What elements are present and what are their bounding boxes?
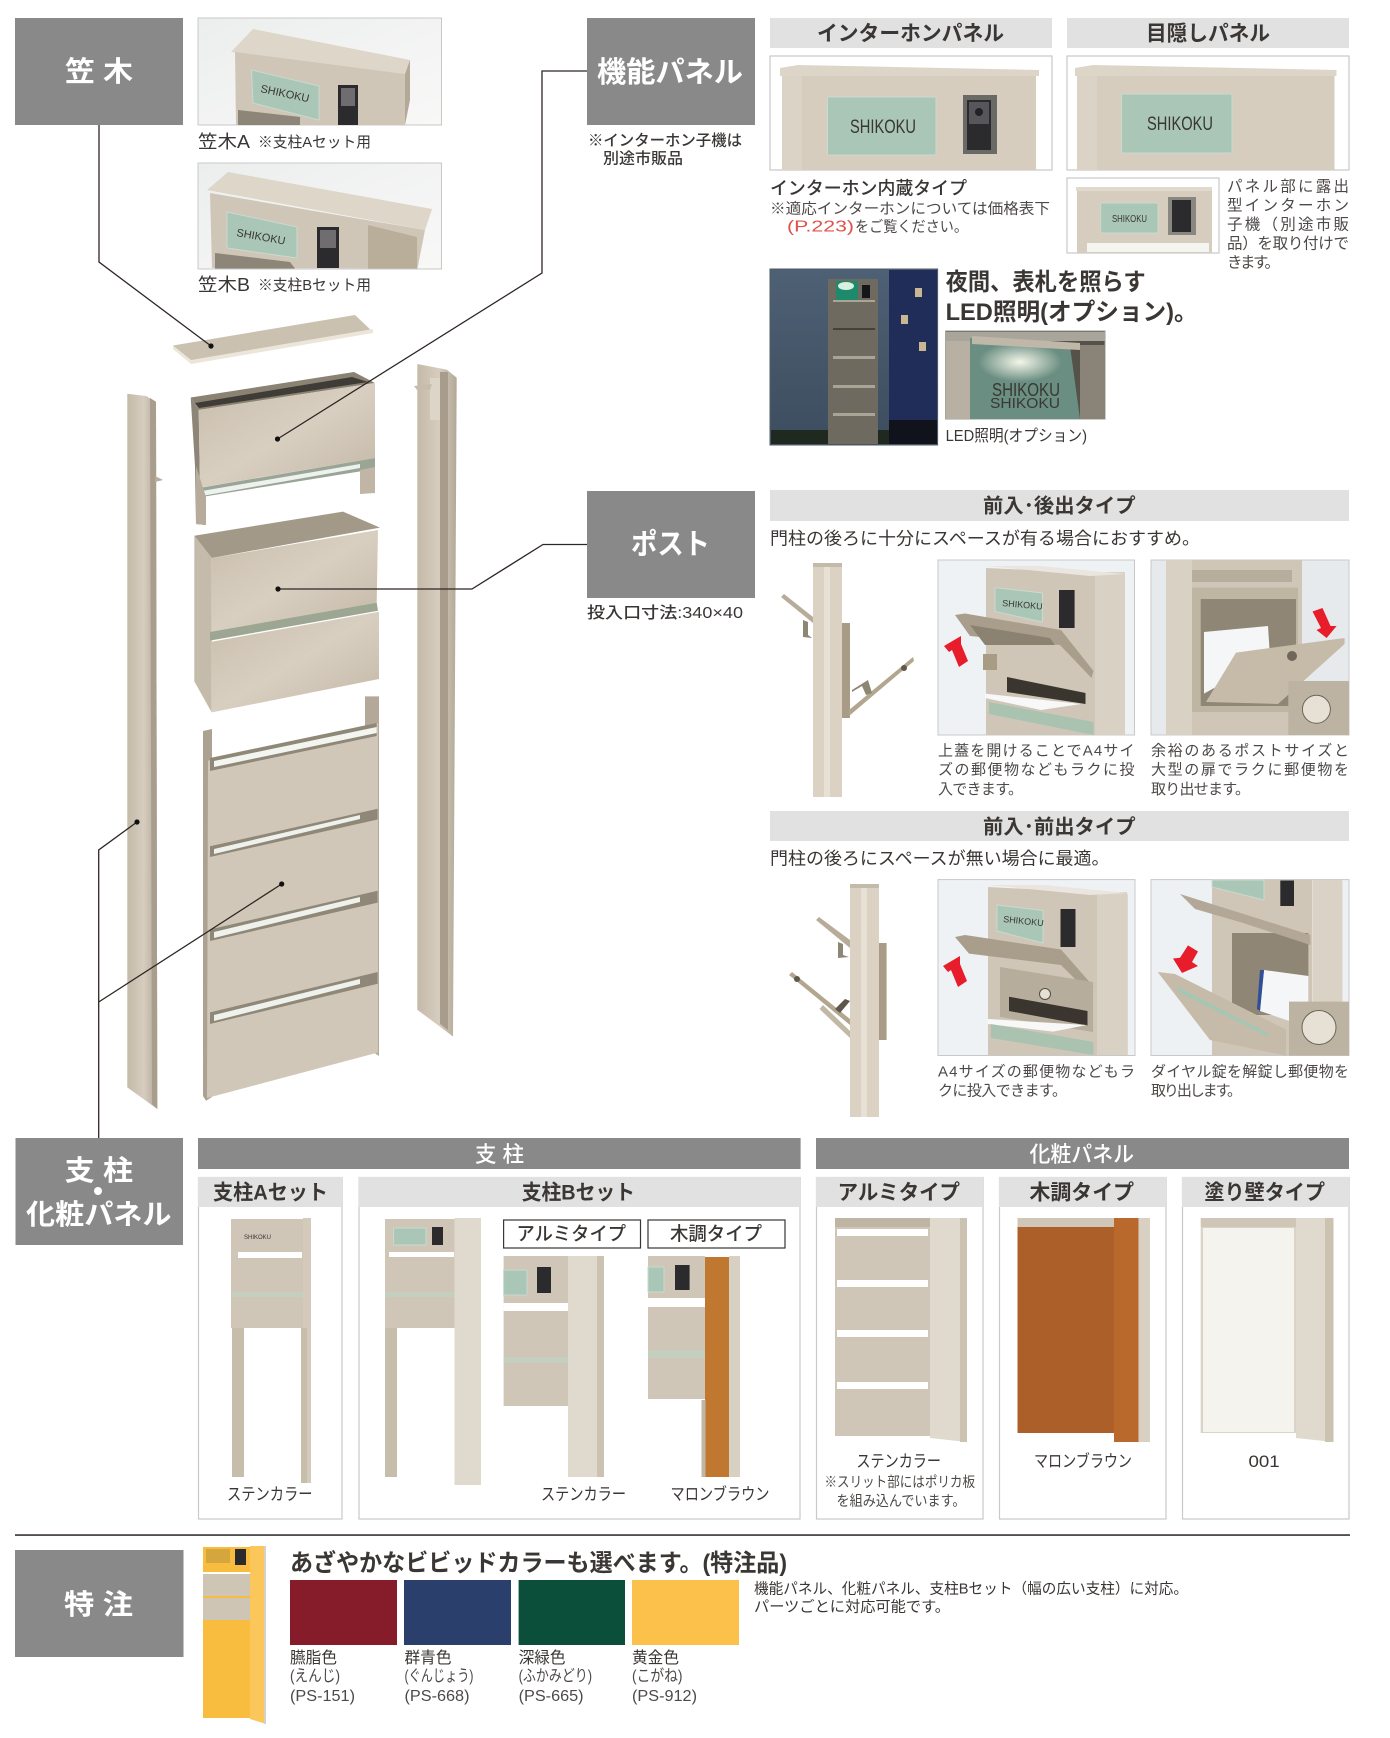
label: 特注: 特 注 <box>64 1589 133 1620</box>
caption: 笠木B: ※支柱Bセット用 <box>258 277 371 294</box>
swatch: 黄金色 <box>632 1580 739 1705</box>
bar: 化粧パネル: 化粧パネル <box>1030 1142 1134 1167</box>
photo: LED照明: SHIKOKU <box>992 380 1060 400</box>
swatch: 群青色 <box>404 1580 511 1705</box>
header: インターホンパネル <box>770 18 1052 48</box>
swatch: 臙脂色: 臙脂色 <box>290 1649 337 1667</box>
tag: アルミタイプ <box>504 1220 640 1248</box>
caption: ダイヤル錠: ダイヤル錠を解錠し郵便物を <box>1151 1064 1349 1080</box>
swatch: 群青色: 群青色 <box>404 1649 452 1667</box>
product: 支柱Aセット <box>231 1218 311 1483</box>
caption: A4サイズ: A4サイズの郵便物などもラ <box>938 1064 1135 1080</box>
caption: LED照明: LED照明(オプション) <box>946 427 1087 445</box>
swatch: 深緑色: 深緑色 <box>519 1649 566 1667</box>
illustration: 前入・前出 side view <box>789 884 887 1117</box>
caption: 笠木B: 笠木B <box>198 275 250 295</box>
caption: 余裕のあるポスト <box>1151 742 1349 798</box>
photo: 大型の扉 <box>1151 560 1349 735</box>
swatch: 群青色: (PS-668) <box>404 1688 470 1705</box>
note: インターホン子機: 別途市販品 <box>603 150 683 168</box>
header: 前入・後出タイプ: 前入･後出タイプ <box>983 494 1136 518</box>
photo: インターホンパネル <box>770 56 1052 170</box>
arrow: red up-left <box>944 636 968 667</box>
connector: 支柱・化粧パネル <box>99 819 284 1138</box>
panel: アルミタイプ <box>816 1177 983 1519</box>
text: 十分にスペース: 門柱の後ろに十分にスペースが有る場合におすすめ。 <box>770 528 1200 548</box>
label: ポスト: ポスト <box>631 528 710 561</box>
panel: 木調タイプ <box>999 1177 1166 1519</box>
swatch: 深緑色: (ふかみどり) <box>519 1667 592 1685</box>
arrow: red up-left 2 <box>943 956 967 987</box>
exploded: 笠木 lid <box>173 315 373 364</box>
text: パネル部に露出型 <box>1227 178 1349 272</box>
swatch: 臙脂色 <box>290 1580 397 1705</box>
caption: ダイヤル錠: 取り出します。 <box>1151 1082 1242 1100</box>
product: 木調化粧パネル <box>1018 1218 1150 1442</box>
photo: 笠木A <box>198 18 442 125</box>
header: 目隠しパネル <box>1067 18 1349 48</box>
photo: 目隠しパネル: SHIKOKU <box>1147 114 1213 135</box>
arrow: red down-left <box>1173 945 1198 973</box>
label: 機能パネル: 機能パネル <box>597 56 743 89</box>
label: 支柱・化粧パネル: 化粧パネル <box>26 1199 172 1230</box>
header: 目隠しパネル: 目隠しパネル <box>1146 22 1270 46</box>
header: 前入・後出タイプ <box>770 490 1349 521</box>
text: パネル部に露出型: きます。 <box>1227 254 1280 272</box>
text: ステンカラー: ステンカラー <box>541 1485 626 1504</box>
photo: 夜間の門柱 <box>770 269 938 445</box>
header: 前入・前出タイプ: 前入･前出タイプ <box>983 816 1136 838</box>
heading: LED照明: 夜間、表札を照らす <box>946 269 1146 296</box>
text: パネル部に露出型: 型インターホン <box>1227 196 1349 214</box>
label: 支柱・化粧パネル <box>16 1138 183 1245</box>
label: 機能パネル <box>587 18 755 125</box>
panel: 支柱Aセット: 支柱Aセット <box>213 1182 328 1204</box>
caption: 上蓋を開ける: 上蓋を開けることでA4サイ <box>938 742 1134 760</box>
swatch: 黄金色: (PS-912) <box>632 1688 697 1705</box>
photo: 露出型インターホン: SHIKOKU <box>1112 214 1147 225</box>
arrow: red down-right <box>1312 608 1337 638</box>
text: ステンカラー: ステンカラー <box>227 1485 312 1504</box>
swatch: 深緑色: (PS-665) <box>519 1688 584 1705</box>
note: 投入口寸法: 投入口寸法:340×40 <box>587 604 743 622</box>
panel: 支柱Bセット: 支柱Bセット <box>522 1182 635 1204</box>
caption: 上蓋を開ける: ズの郵便物などもラクに投 <box>938 762 1134 778</box>
bar: 支柱 <box>198 1138 801 1169</box>
text: ステンカラー: ステンカラー <box>856 1452 941 1471</box>
product: 支柱Aセット: SHIKOKU <box>244 1235 271 1241</box>
text: 対応パーツ: パーツごとに対応可能です。 <box>754 1598 950 1616</box>
product: アルミ化粧パネル <box>835 1218 967 1442</box>
panel: 木調タイプ: 木調タイプ <box>1030 1182 1134 1204</box>
swatch: 黄金色: (こがね) <box>632 1667 682 1685</box>
caption: A4サイズ <box>938 1064 1135 1100</box>
photo: LED照明: SHIKOKU <box>990 395 1060 412</box>
caption: 余裕のあるポスト: 余裕のあるポストサイズと <box>1151 742 1349 760</box>
label: 特注 <box>15 1550 184 1657</box>
swatch: 臙脂色: (PS-151) <box>290 1688 355 1705</box>
text: インターホン内蔵タイプ: (P.223) <box>787 218 854 236</box>
exploded: left post <box>127 394 163 1109</box>
photo: A4サイズ投入: SHIKOKU <box>1003 914 1044 928</box>
text: 対応パーツ <box>754 1580 1188 1616</box>
text: ステンカラー: を組み込んでいます。 <box>836 1493 966 1510</box>
caption: 余裕のあるポスト: 大型の扉でラクに郵便物を <box>1151 762 1349 778</box>
label: 支柱・化粧パネル: 支 柱 <box>65 1155 133 1186</box>
panel: 支柱Bセット <box>358 1177 800 1519</box>
text: 対応パーツ: 機能パネル、化粧パネル、支柱Bセット（幅の広い支柱）に対応。 <box>754 1580 1188 1598</box>
exploded: ポスト <box>194 512 380 712</box>
panel: 支柱Aセット <box>198 1177 342 1519</box>
illustration: 前入・後出 side view <box>781 563 914 797</box>
text: インターホン内蔵タイプ: をご覧ください。 <box>855 218 968 236</box>
caption: 余裕のあるポスト: 取り出せます。 <box>1151 781 1250 798</box>
text: インターホン内蔵タイプ <box>770 178 1050 236</box>
bar: 化粧パネル <box>816 1138 1349 1169</box>
note: インターホン子機 <box>588 132 742 168</box>
photo: インターホンパネル: SHIKOKU <box>850 117 916 138</box>
product: アルミタイプ <box>504 1256 604 1477</box>
product: 支柱Bセット <box>385 1218 481 1485</box>
caption: 笠木A: ※支柱Aセット用 <box>258 134 371 151</box>
caption: A4サイズ: クに投入できます。 <box>938 1082 1067 1100</box>
connector: 機能パネル <box>275 71 587 442</box>
photo: 目隠しパネル <box>1067 56 1349 170</box>
photo: A4サイズ投入 <box>938 880 1135 1056</box>
heading: LED照明: LED照明(オプション)。 <box>946 299 1198 326</box>
header: 前入・前出タイプ <box>770 811 1349 841</box>
photo: 上蓋を開ける: SHIKOKU <box>1002 598 1043 612</box>
caption: 上蓋を開ける: 入できます。 <box>938 781 1023 798</box>
tag: 木調タイプ: 木調タイプ <box>670 1223 762 1245</box>
swatch: 黄金色: 黄金色 <box>632 1649 679 1667</box>
text: スペースが無い: 門柱の後ろにスペースが無い場合に最適。 <box>770 848 1110 868</box>
header: インターホンパネル: インターホンパネル <box>817 22 1004 46</box>
photo: ダイヤル錠 <box>1151 880 1349 1056</box>
label: 笠木: 笠 木 <box>65 56 133 87</box>
product: 特注カラー門柱 <box>203 1546 266 1724</box>
photo: 笠木B: SHIKOKU <box>235 227 286 248</box>
swatch: 深緑色 <box>519 1580 625 1705</box>
panel: 塗り壁タイプ: 塗り壁タイプ <box>1204 1182 1325 1204</box>
tag: 木調タイプ <box>648 1220 785 1248</box>
exploded: 化粧パネル <box>203 696 379 1101</box>
exploded: 機能パネル <box>191 372 375 525</box>
caption: 笠木A <box>198 132 371 152</box>
text: パネル部に露出型: 品）を取り付けで <box>1227 234 1349 252</box>
text: インターホン内蔵タイプ: ※適応インターホンについては価格表下 <box>770 200 1050 218</box>
photo: 笠木A: SHIKOKU <box>259 83 310 105</box>
section: 前入・前出タイプ <box>770 811 1349 1117</box>
bar: 支柱: 支 柱 <box>475 1142 524 1167</box>
label: 笠木 <box>15 18 183 125</box>
connector: ポスト <box>275 544 587 592</box>
caption: ダイヤル錠 <box>1151 1064 1349 1100</box>
heading: LED照明 <box>946 269 1198 326</box>
photo: 笠木B <box>198 163 442 269</box>
product: 木調タイプ <box>648 1256 740 1477</box>
panel: アルミタイプ: アルミタイプ <box>838 1182 960 1204</box>
text: パネル部に露出型: パネル部に露出 <box>1227 178 1349 196</box>
text: マロンブラウン: マロンブラウン <box>1034 1451 1132 1471</box>
tag: アルミタイプ: アルミタイプ <box>516 1223 626 1245</box>
heading: ビビッドカラー: あざやかなビビッドカラーも選べます。(特注品) <box>290 1549 787 1577</box>
caption: 上蓋を開ける <box>938 742 1134 798</box>
note: インターホン子機: ※インターホン子機は <box>588 132 742 150</box>
photo: 露出型インターホン <box>1067 178 1219 253</box>
label: ポスト <box>587 491 755 598</box>
exploded: right post <box>414 364 457 1036</box>
photo: 上蓋を開ける <box>938 560 1134 735</box>
panel: 塗り壁タイプ <box>1182 1177 1349 1519</box>
text: マロンブラウン: マロンブラウン <box>670 1484 770 1504</box>
connector: 笠木 <box>99 125 214 349</box>
text: インターホン内蔵タイプ: インターホン内蔵タイプ <box>770 178 967 198</box>
photo: LED照明 <box>946 331 1105 419</box>
caption: 笠木A: 笠木A <box>198 132 250 152</box>
swatch: 臙脂色: (えんじ) <box>290 1668 340 1685</box>
swatch: 群青色: (ぐんじょう) <box>404 1668 474 1685</box>
caption: 笠木B <box>198 275 371 295</box>
text: 001: 001 <box>1248 1452 1280 1471</box>
text: ステンカラー: ※スリット部にはポリカ板 <box>824 1474 975 1491</box>
text: ステンカラー <box>824 1452 975 1510</box>
text: パネル部に露出型: 子機（別途市販 <box>1227 216 1349 234</box>
product: 塗り壁化粧パネル <box>1201 1218 1334 1442</box>
